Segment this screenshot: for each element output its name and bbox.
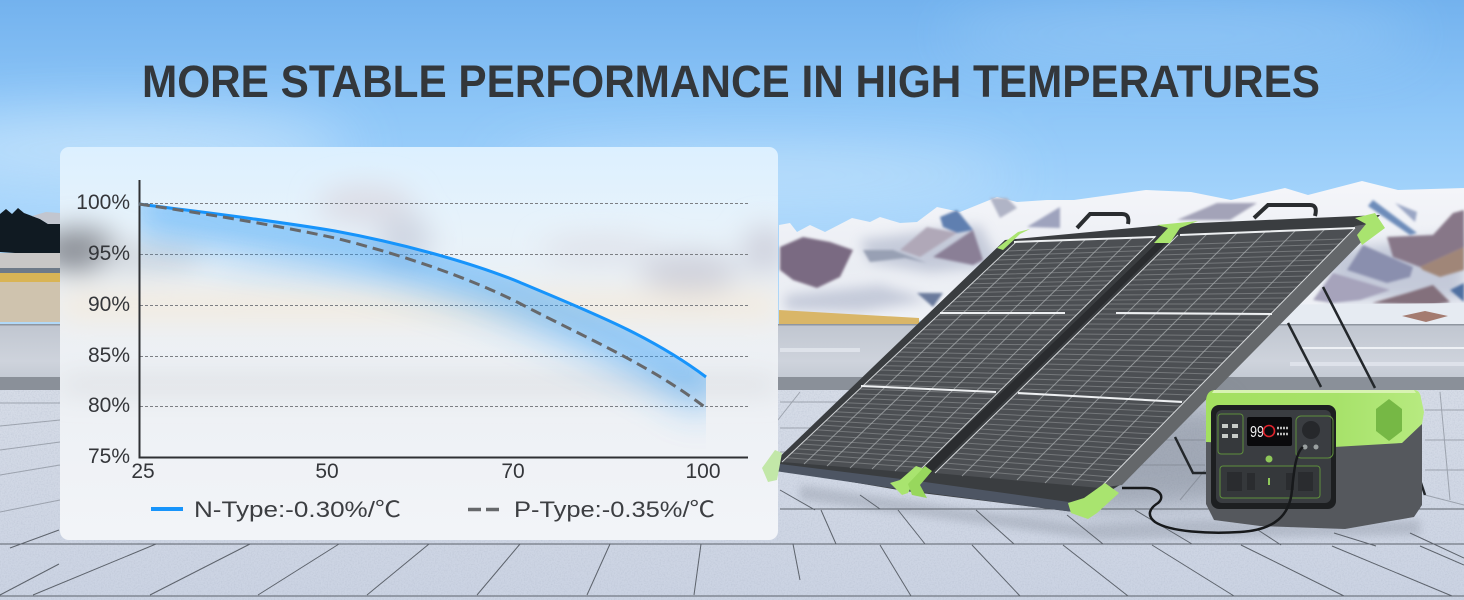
y axis labels: 100%	[76, 191, 130, 214]
y axis labels: 80%	[88, 394, 130, 417]
station body	[1206, 420, 1422, 529]
legend: P-Type: P-Type:-0.35%/℃	[514, 497, 715, 522]
x axis labels: 70	[501, 460, 525, 483]
left panel face	[782, 236, 1156, 473]
P-Type curve	[139, 204, 706, 408]
green corner brackets	[762, 213, 1385, 519]
legend: N-Type	[151, 497, 401, 522]
x axis labels: 50	[315, 460, 339, 483]
title: MORE STABLE PERFORMANCE IN HIGH TEMPERATURES	[142, 56, 1320, 107]
right panel face	[935, 228, 1355, 488]
panel frame and underside	[768, 215, 1380, 512]
x axis labels: 100	[685, 460, 721, 483]
area between curves and axis	[130, 208, 716, 392]
centre hinge	[918, 237, 1172, 476]
N-Type curve	[139, 204, 706, 377]
y axis labels: 85%	[88, 344, 130, 367]
folding solar panel	[762, 213, 1385, 519]
USB port group	[1218, 414, 1243, 454]
vent hexagon	[1376, 399, 1402, 441]
snowy mountain range	[779, 181, 1464, 330]
axes	[140, 180, 748, 458]
legend: N-Type: N-Type:-0.30%/℃	[194, 497, 401, 522]
power button	[1266, 456, 1272, 462]
AC outlet group	[1220, 466, 1320, 498]
left tree line	[0, 208, 60, 322]
solar panel carry handles	[1077, 205, 1316, 228]
charging cable	[1122, 447, 1303, 533]
round DC socket	[1296, 416, 1333, 458]
chart gridlines	[140, 204, 748, 406]
power station	[1206, 390, 1424, 529]
solar panel kickstand legs	[1175, 287, 1425, 495]
front control panel	[1211, 405, 1336, 509]
blurred scenery seen through the frosted panel	[38, 185, 787, 390]
y axis labels: 90%	[88, 293, 130, 316]
green top shell	[1206, 390, 1424, 447]
x axis labels: 25	[131, 460, 155, 483]
x axis labels	[131, 460, 721, 483]
LCD display	[1247, 417, 1292, 446]
panel: temperature performance chart	[38, 147, 787, 540]
LCD display: 99	[1250, 424, 1264, 441]
y axis labels: 75%	[88, 445, 130, 468]
paved ground	[0, 324, 1464, 600]
y axis labels	[76, 191, 130, 468]
y axis labels: 95%	[88, 242, 130, 265]
